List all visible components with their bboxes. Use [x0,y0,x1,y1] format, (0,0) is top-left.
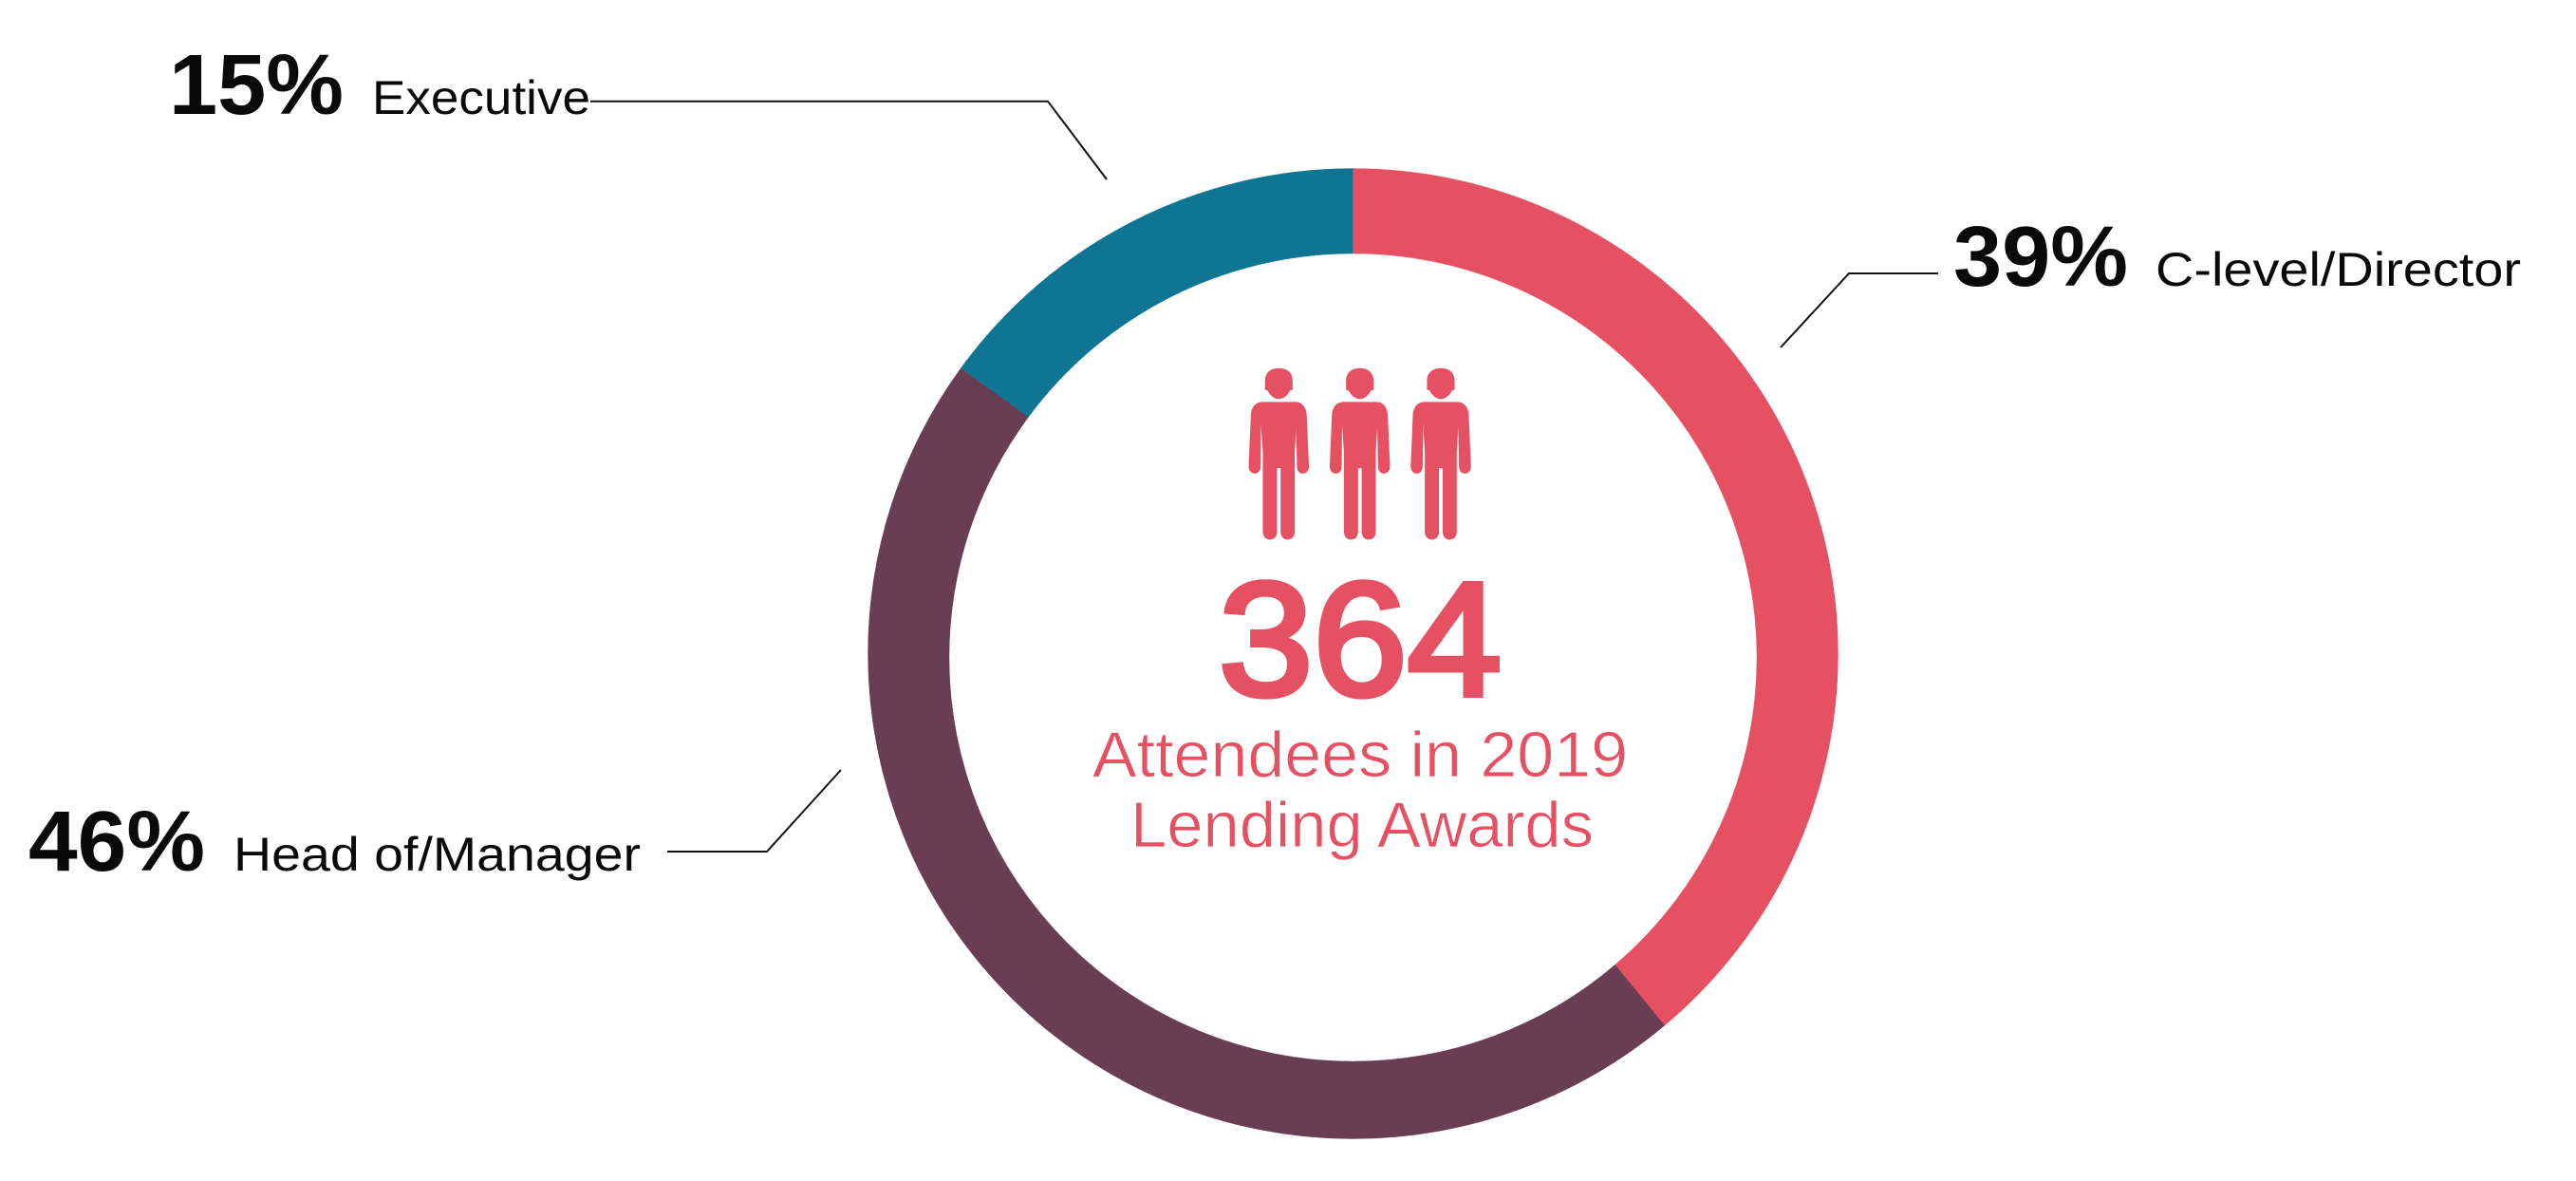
segment: c-level/director 39% [1353,169,1838,1025]
center caption [1092,719,1628,861]
segment: head of/manager 46% [868,368,1665,1139]
callout: executive [169,38,1107,179]
leader line [1781,273,1938,347]
center number: 364 [1219,550,1502,730]
value: 15%: 15% [169,38,344,133]
label: c-level/director: C-level/Director [2156,243,2521,296]
leader line [590,102,1107,179]
callout: c-level/director [1781,210,2521,347]
segment: executive 15% [961,169,1353,417]
value: 46%: 46% [28,795,205,890]
icon: three people [1249,368,1471,539]
caption line 1: Attendees in 2019 [1092,719,1628,791]
leader line [667,770,841,852]
caption line 2: Lending Awards [1130,789,1594,861]
icon: person 3 [1410,368,1471,539]
value: 39%: 39% [1953,210,2128,305]
label: executive: Executive [372,71,590,124]
label: head of/manager: Head of/Manager [233,828,641,881]
icon: person 2 [1330,368,1390,539]
callout: head of/manager [28,770,841,890]
icon: person 1 [1249,368,1309,539]
donut chart [868,169,1838,1139]
